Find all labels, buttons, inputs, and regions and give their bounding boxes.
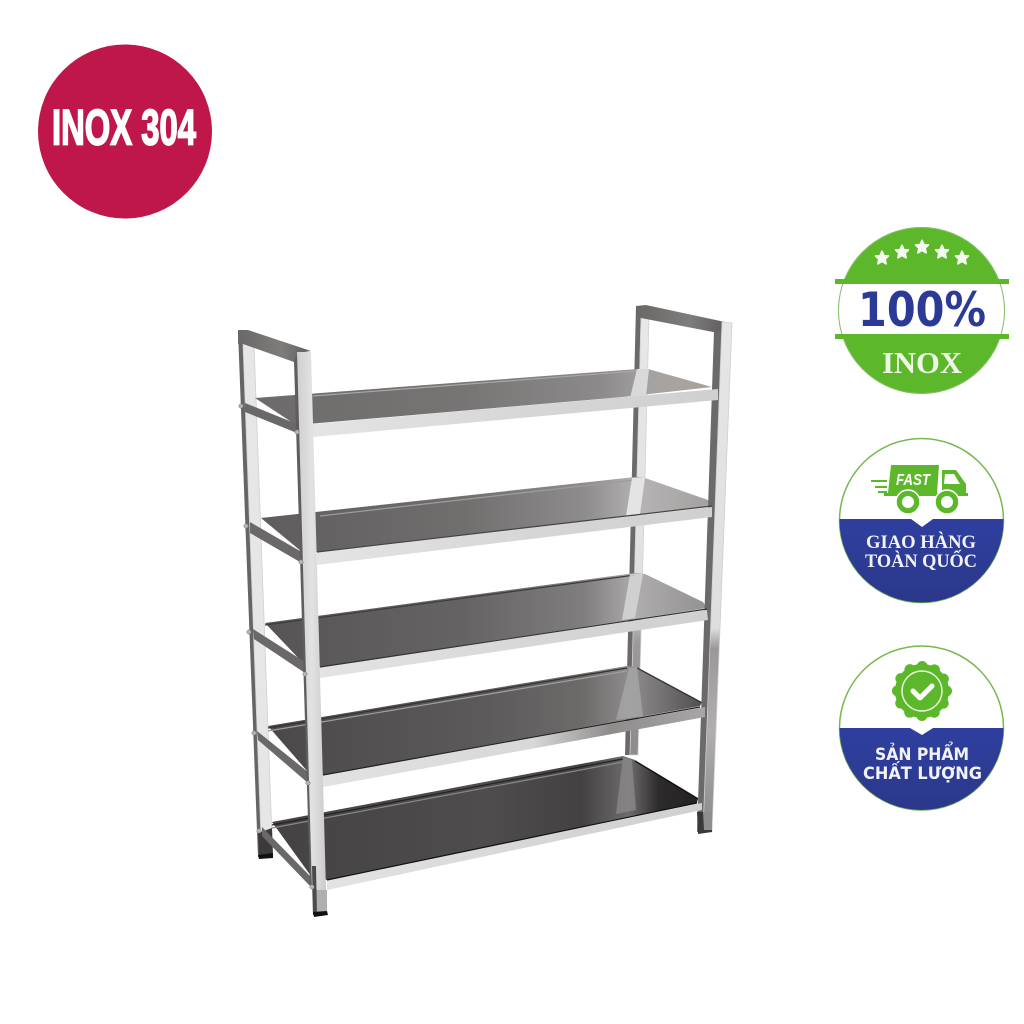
quality text: SẢN PHẨM <box>875 742 969 764</box>
back right post <box>625 306 649 755</box>
back feet <box>258 828 273 859</box>
green ring on band <box>838 228 1004 394</box>
badge: INOX 304: INOX 304 <box>52 100 196 156</box>
left side rails <box>245 403 310 886</box>
delivery text: GIAO HÀNG <box>866 531 976 553</box>
shelf reflections of the back posts <box>616 369 649 814</box>
tier 5 shelf plate <box>272 756 698 880</box>
front rails <box>313 389 718 890</box>
badge: 100% INOX <box>830 227 1020 394</box>
right front post dark side <box>697 323 722 832</box>
white band <box>838 284 1005 334</box>
delivery text <box>865 531 977 572</box>
INOX text: INOX <box>882 345 963 380</box>
delivery text: TOÀN QUỐC <box>865 550 977 572</box>
top left handle frame <box>238 330 311 362</box>
tier 4 shelf plate <box>268 666 702 775</box>
blue lower half <box>840 728 1004 810</box>
tier 2 shelf plate <box>261 477 712 552</box>
shoe rack product illustration <box>238 305 732 917</box>
icon: fast truck: FAST <box>896 472 931 489</box>
tier 1 shelf plate <box>255 369 712 425</box>
front right post <box>697 322 732 834</box>
front left post <box>294 352 328 917</box>
icon: quality seal with check <box>895 664 949 718</box>
tier 3 shelf plate <box>265 573 707 667</box>
back left post <box>238 331 272 857</box>
bolts <box>239 404 314 889</box>
icon: fast truck <box>871 465 968 514</box>
quality text <box>863 742 982 783</box>
top right handle frame <box>636 305 725 332</box>
quality text: CHẤT LƯỢNG <box>863 762 982 783</box>
blue lower half <box>840 519 1004 602</box>
100% text: 100% <box>858 283 986 338</box>
badge: INOX 304 <box>38 44 212 218</box>
ribbon bars <box>835 279 1009 339</box>
front edge shadows <box>317 506 712 880</box>
badge: quality product <box>835 646 1010 818</box>
back edge highlights <box>265 371 702 828</box>
five stars <box>876 240 968 264</box>
badge: fast delivery <box>835 438 1010 609</box>
